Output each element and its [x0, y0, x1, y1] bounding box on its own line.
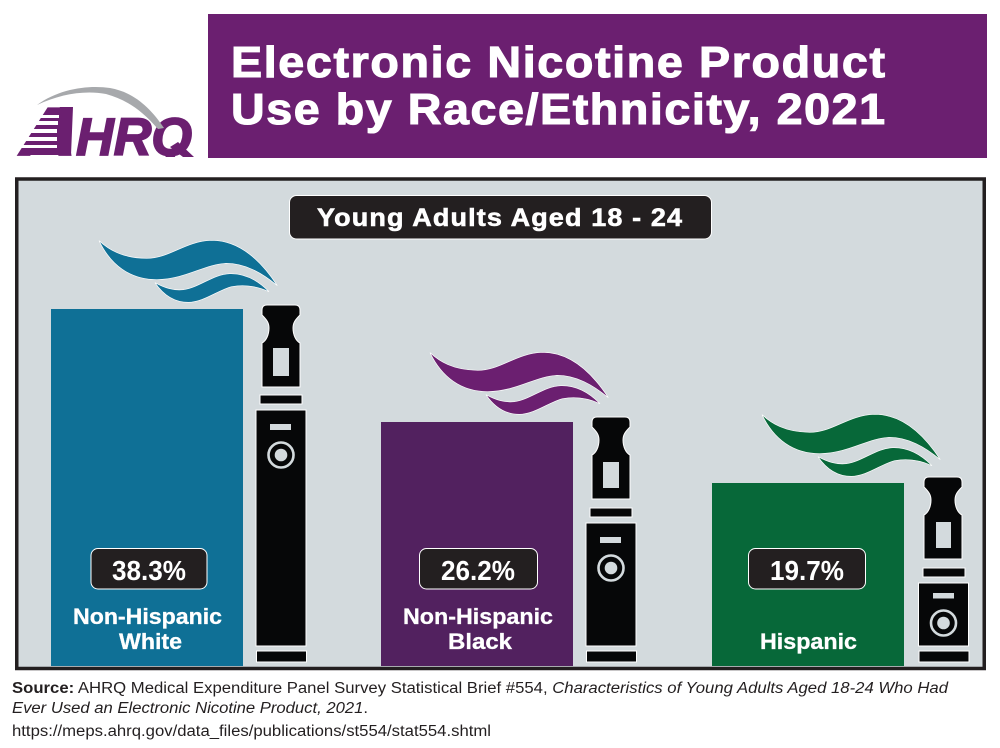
source note	[12, 680, 948, 740]
heading pill: Young Adults Aged 18 - 24	[290, 196, 712, 239]
label: Non-Hispanic White: White	[119, 629, 182, 654]
bar: Hispanic 19.7%	[712, 483, 904, 666]
label: Hispanic: Hispanic	[760, 629, 857, 654]
group: Hispanic	[712, 414, 969, 666]
bar: Non-Hispanic Black 26.2%	[381, 422, 573, 666]
group: Non-Hispanic Black	[381, 352, 636, 666]
value pill: 38.3%	[91, 548, 207, 589]
source url: https://meps.ahrq.gov/data_files/publications/st554/stat554.shtml	[12, 723, 491, 740]
panel: chart background	[17, 179, 984, 668]
logo Q tail mask	[150, 157, 200, 169]
title banner	[208, 14, 987, 158]
icon: vape pen blue	[256, 305, 306, 662]
logo arc	[37, 87, 164, 129]
value pill: 26.2%	[420, 548, 538, 589]
logo stripes	[20, 115, 59, 148]
logo A fill	[20, 107, 73, 155]
heading pill: Young Adults Aged 18 - 24: Young Adults Aged 18 - 24	[317, 203, 683, 232]
title text: Electronic Nicotine Product	[231, 37, 885, 87]
label: Non-Hispanic White: Non-Hispanic	[73, 604, 222, 629]
bar: Non-Hispanic White 38.3%	[51, 309, 243, 666]
logo Q tail	[170, 142, 194, 157]
value pill: 19.7%	[748, 548, 866, 589]
label: Non-Hispanic Black: Black	[448, 629, 513, 654]
icon: smoke purple	[430, 352, 608, 414]
value pill: 26.2%: 26.2%	[441, 555, 515, 586]
icon: smoke blue	[99, 240, 277, 302]
group: Non-Hispanic White	[51, 240, 306, 666]
label: Non-Hispanic Black: Non-Hispanic	[403, 604, 553, 629]
logo lettering: A	[18, 94, 76, 170]
icon: smoke green	[762, 414, 940, 476]
icon: vape pen green	[918, 477, 969, 662]
source line 2: Ever Used an Electronic Nicotine Product, 2021 .	[12, 700, 368, 717]
source line 1: Source: AHRQ Medical Expenditure Panel Survey Statistical Brief #554, Characteristics of Young Adults Aged 18-24 Who Had	[12, 680, 948, 697]
icon: vape pen purple	[586, 417, 636, 662]
value pill: 38.3%: 38.3%	[112, 555, 186, 586]
title text: Use by Race/Ethnicity, 2021	[231, 84, 885, 134]
logo: AHRQ	[18, 87, 200, 170]
value pill: 19.7%: 19.7%	[770, 555, 844, 586]
logo lettering: HRQ	[76, 108, 192, 167]
